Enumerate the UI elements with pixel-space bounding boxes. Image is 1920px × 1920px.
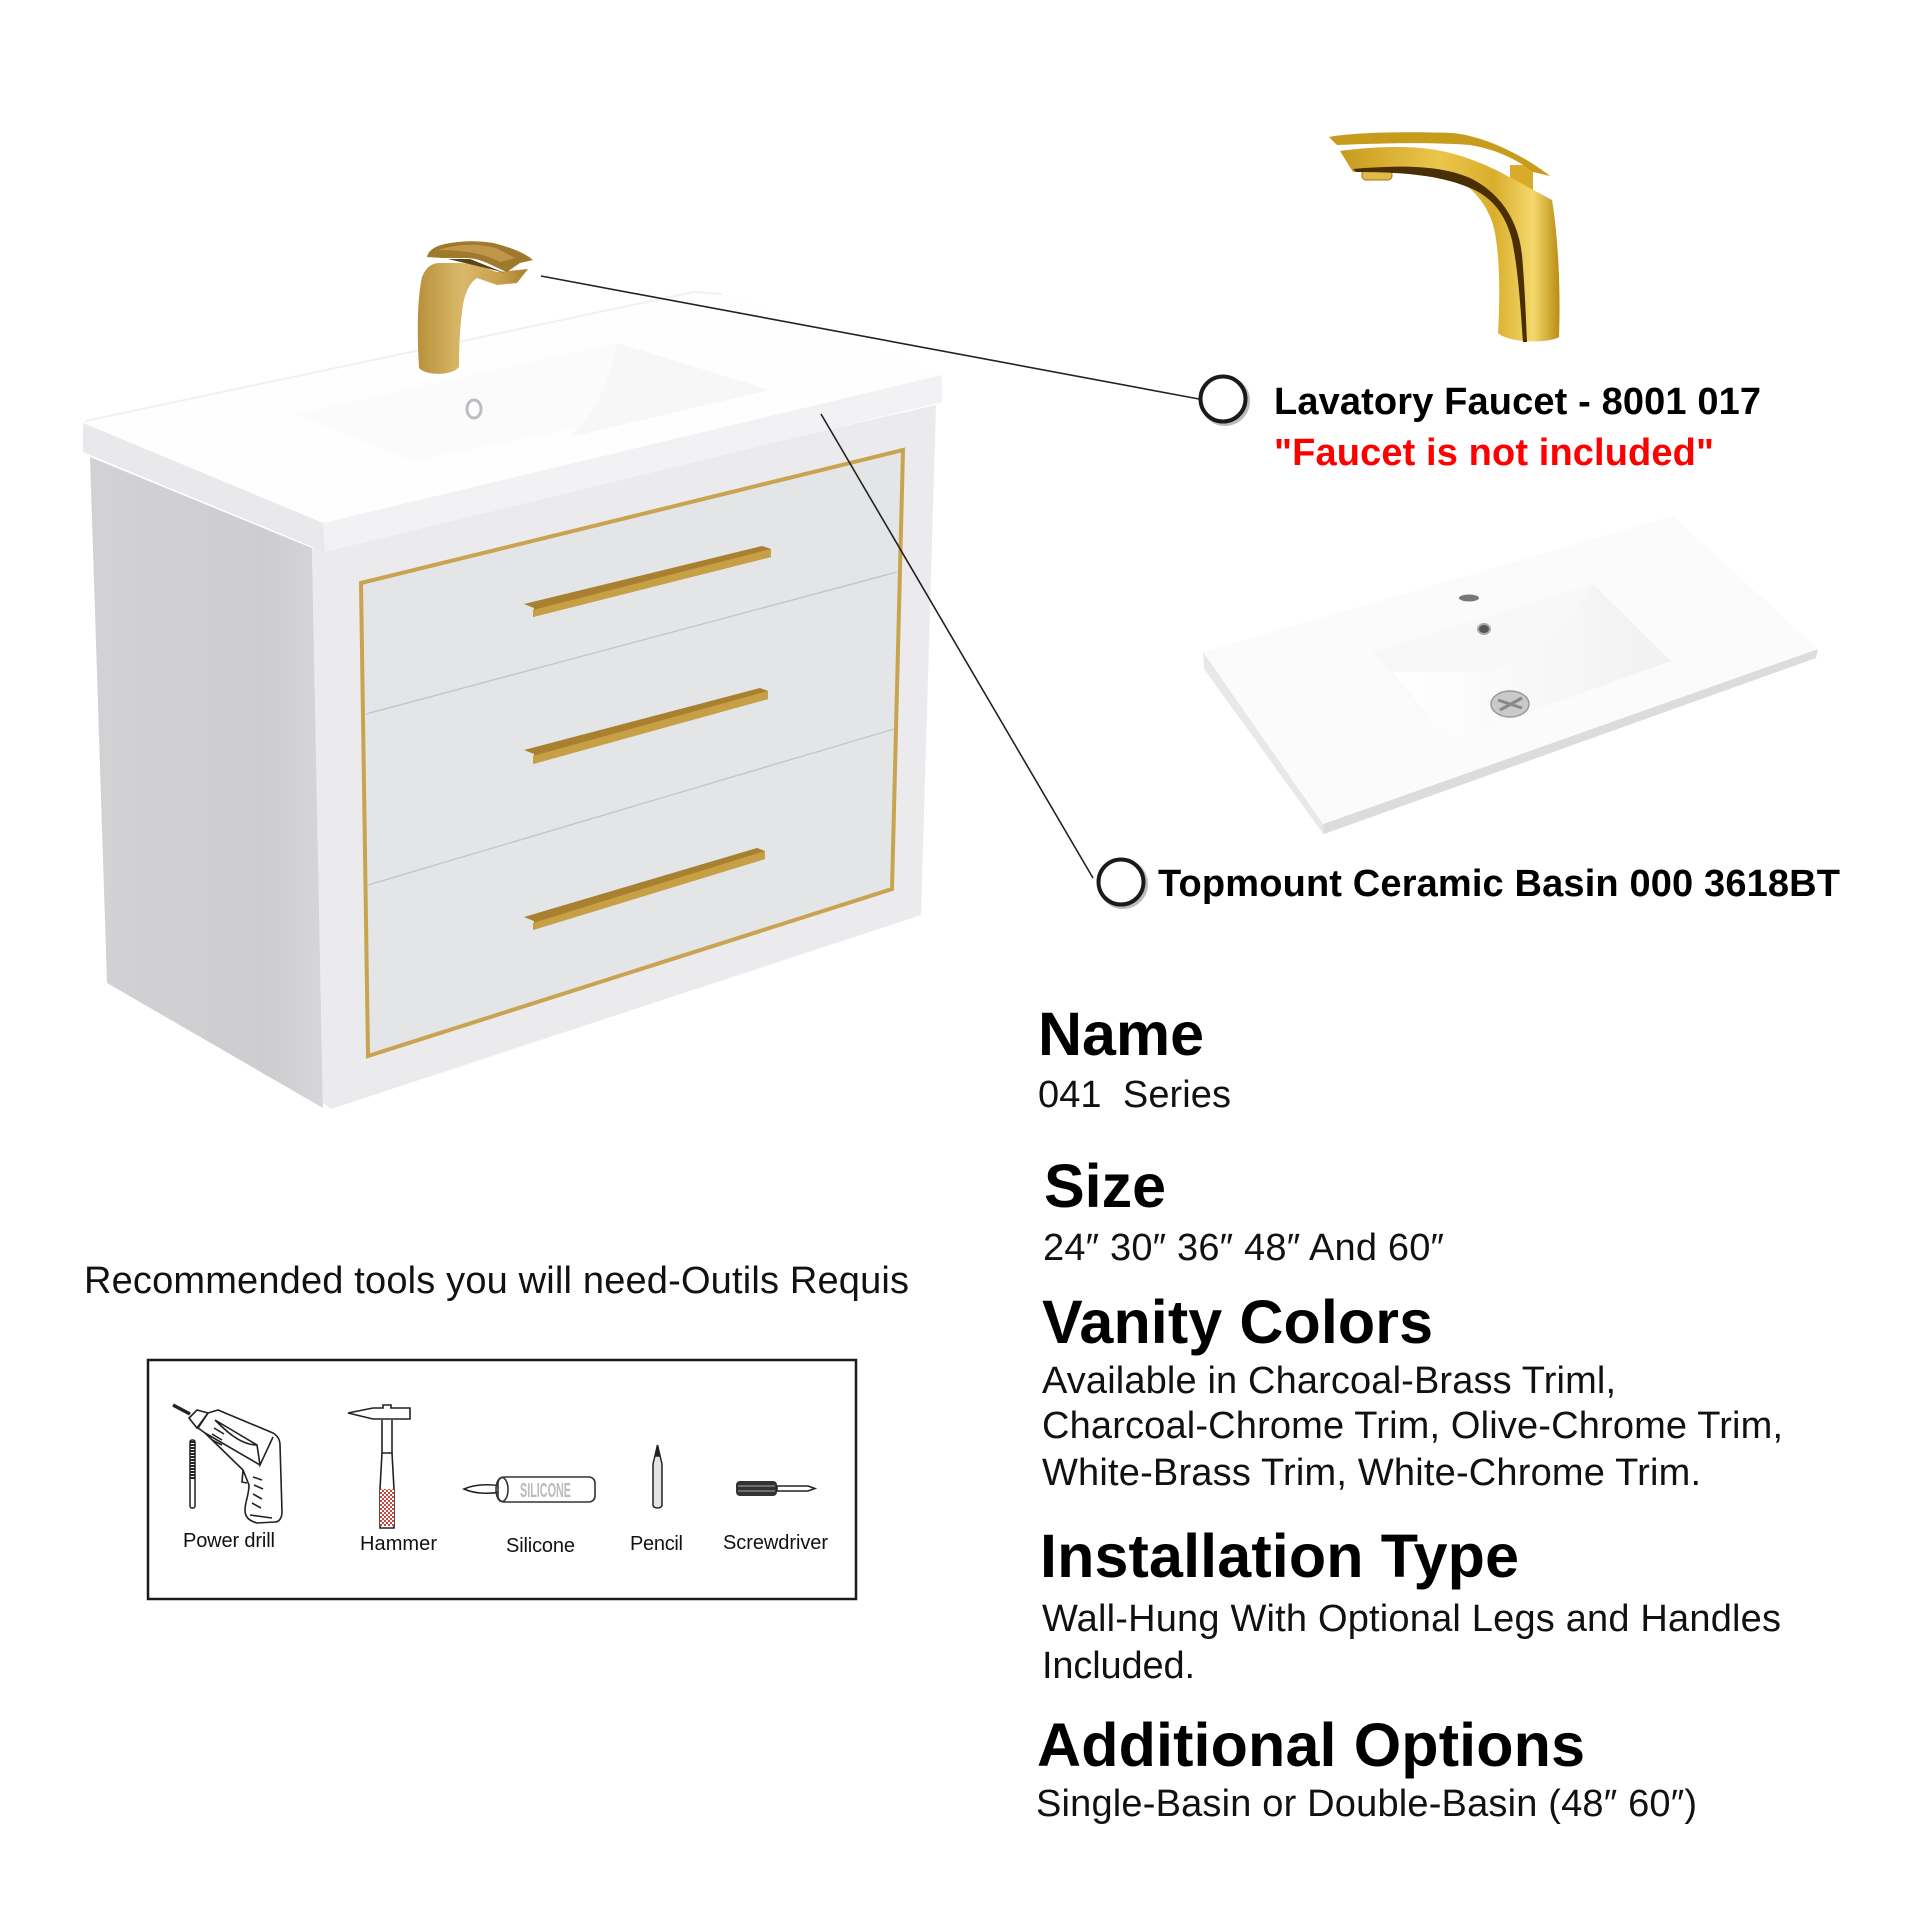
tools heading: Recommended tools you will need-Outils Requis bbox=[84, 1260, 909, 1302]
spec: name: 041 Series bbox=[1038, 1074, 1231, 1116]
spec: installation type: Wall-Hung With Optional Legs and Handles bbox=[1042, 1598, 1781, 1640]
spec: additional options bbox=[1036, 1711, 1697, 1825]
gold trim frame bbox=[361, 450, 903, 1056]
callout line to faucet bbox=[541, 276, 1199, 399]
drain bbox=[1491, 691, 1529, 717]
icon: power drill bbox=[173, 1405, 282, 1523]
basin bowl bbox=[296, 343, 770, 461]
vanity cabinet illustration bbox=[83, 241, 942, 1109]
icon: hammer bbox=[348, 1405, 410, 1528]
spec: size: Size bbox=[1044, 1152, 1166, 1220]
tool labels: Power drill bbox=[183, 1530, 275, 1552]
icon: silicone tube bbox=[464, 1477, 595, 1502]
spec: vanity colors bbox=[1042, 1288, 1783, 1494]
spec: vanity colors: Available in Charcoal-Brass Triml, bbox=[1042, 1360, 1616, 1402]
faucet not included note: "Faucet is not included" bbox=[1274, 432, 1714, 474]
overflow bbox=[1478, 624, 1490, 634]
spec: vanity colors: White-Brass Trim, White-Chrome Trim. bbox=[1042, 1452, 1701, 1494]
tool labels: Hammer bbox=[360, 1533, 437, 1555]
spec: installation type bbox=[1040, 1522, 1781, 1687]
cabinet side panel bbox=[90, 457, 323, 1108]
tool labels: Pencil bbox=[630, 1533, 683, 1555]
tool labels bbox=[183, 1530, 828, 1557]
ceramic basin product photo bbox=[1203, 516, 1818, 835]
spec: additional options: Single-Basin or Double-Basin (48″ 60″) bbox=[1036, 1783, 1697, 1825]
drawer seams bbox=[366, 572, 897, 885]
spec: name bbox=[1038, 1000, 1231, 1116]
spec: size: 24″ 30″ 36″ 48″ And 60″ bbox=[1043, 1227, 1444, 1269]
faucet stem bbox=[1510, 165, 1533, 191]
tools panel bbox=[148, 1360, 856, 1599]
faucet aerator bbox=[1362, 170, 1392, 180]
vanity faucet bbox=[418, 241, 533, 374]
tool labels: Screwdriver bbox=[723, 1532, 828, 1554]
spec: installation type: Installation Type bbox=[1040, 1522, 1519, 1590]
faucet callout marker bbox=[1200, 376, 1248, 424]
icon: pencil bbox=[653, 1445, 662, 1508]
callout line to basin bbox=[821, 414, 1093, 878]
icon: screwdriver bbox=[736, 1481, 815, 1496]
faucet lever bbox=[1329, 132, 1550, 176]
spec: installation type: Included. bbox=[1042, 1645, 1195, 1687]
spec: size bbox=[1043, 1152, 1444, 1269]
faucet label: Lavatory Faucet - 8001 017 bbox=[1274, 381, 1761, 423]
faucet product photo bbox=[1329, 132, 1560, 342]
faucet body bbox=[1340, 147, 1560, 341]
cabinet front frame bbox=[312, 405, 936, 1109]
countertop bbox=[83, 290, 942, 552]
icon: silicone tube: SILICONE bbox=[520, 1480, 571, 1502]
spec: vanity colors: Charcoal-Chrome Trim, Olive-Chrome Trim, bbox=[1042, 1405, 1783, 1447]
tap hole bbox=[1459, 594, 1479, 602]
basin callout marker bbox=[1098, 860, 1146, 907]
spec: name: Name bbox=[1038, 1000, 1204, 1068]
faucet shadow line bbox=[1353, 167, 1527, 342]
overflow hole bbox=[467, 400, 481, 418]
drawer handles bbox=[524, 546, 771, 930]
tool labels: Silicone bbox=[506, 1535, 575, 1557]
spec: vanity colors: Vanity Colors bbox=[1042, 1288, 1433, 1356]
spec: additional options: Additional Options bbox=[1037, 1711, 1585, 1779]
basin label: Topmount Ceramic Basin 000 3618BT bbox=[1158, 863, 1840, 905]
